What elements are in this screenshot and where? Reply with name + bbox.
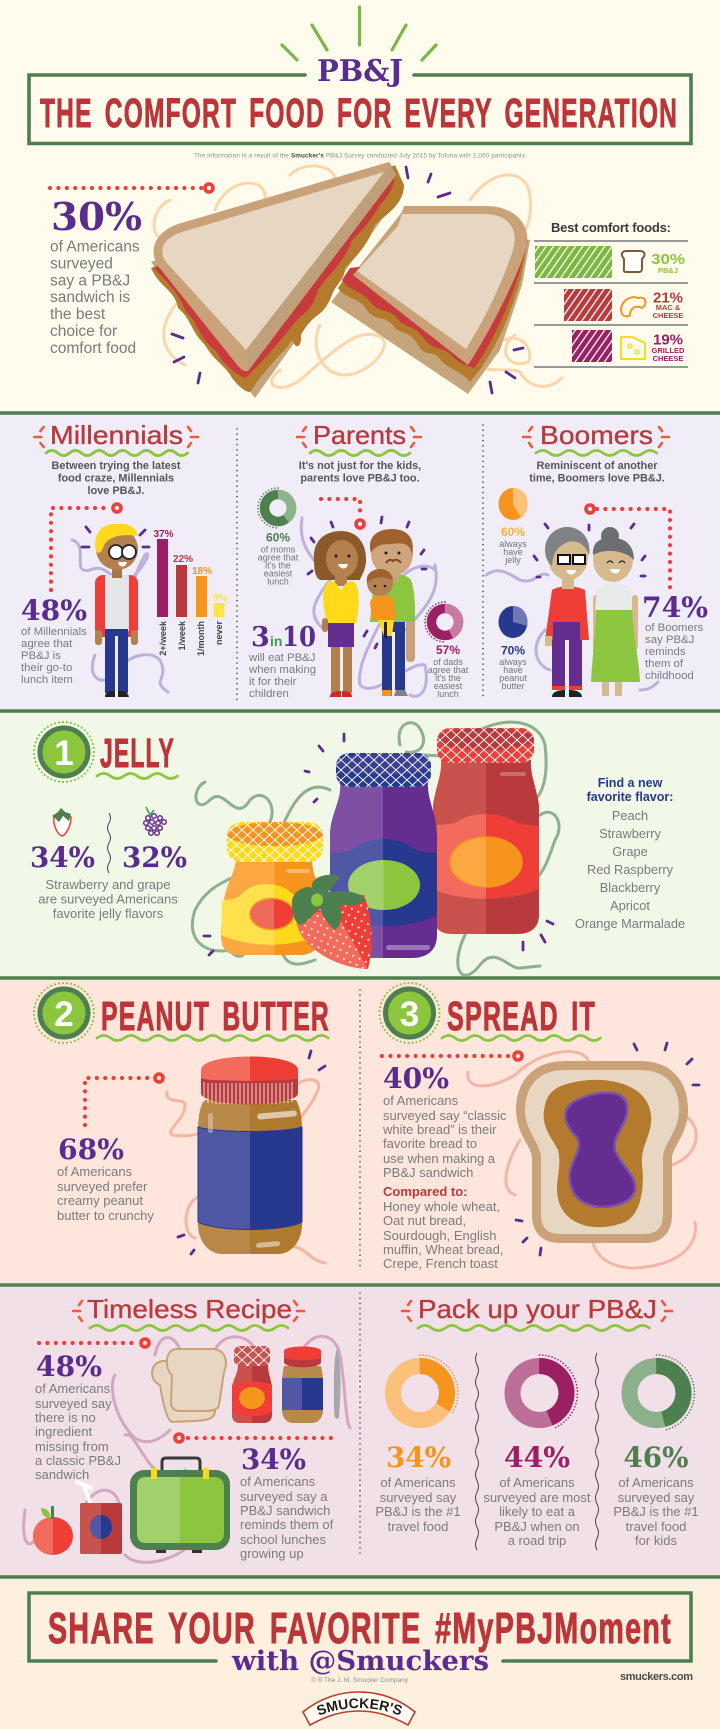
intro text [52, 460, 181, 497]
flavor list: favorite flavor: [587, 790, 673, 804]
heading [297, 420, 421, 456]
stat description: say PB&J [645, 634, 694, 646]
stat: 74%: 74% [642, 591, 708, 624]
stat: peanut butter: butter [501, 681, 525, 691]
stat description: of Americans [57, 1164, 133, 1179]
stat description: missing from [35, 1439, 109, 1454]
stat: 3 in 10 [251, 622, 316, 653]
heading [34, 420, 198, 456]
intro text [529, 460, 665, 484]
callout dotted line [175, 1434, 335, 1442]
stat: 46% kids: 46% [624, 1441, 688, 1474]
stat: 34% travel food: travel food [388, 1519, 448, 1534]
stat: jelly: jelly [504, 555, 521, 565]
jar: grape jelly [330, 753, 437, 958]
number badge: 3 [380, 983, 440, 1043]
stat description: PB&J sandwich [383, 1165, 473, 1180]
stat description: surveyed [50, 256, 113, 272]
heading [402, 1294, 672, 1330]
column divider [359, 1293, 361, 1557]
stat: 44% road trip: likely to eat a [499, 1504, 576, 1519]
flavor list: Apricot [610, 898, 650, 913]
flavor list: Find a new [598, 776, 663, 790]
illustration: jelly jar [232, 1346, 272, 1423]
label: mac and cheese 21%: 21% [653, 290, 683, 306]
label: grilled cheese 19%: 19% [653, 332, 683, 348]
donut: travel food 34% [393, 1355, 458, 1420]
stat description: reminds [645, 646, 686, 658]
pie: jelly 60% [498, 488, 528, 520]
stat description: surveyed prefer [57, 1179, 148, 1194]
heading [73, 1294, 304, 1330]
decorative squiggles [468, 1052, 696, 1268]
label: PB&J 30% [651, 251, 685, 275]
stat: moms: lunch [267, 576, 289, 586]
description: Strawberry and grape [45, 877, 171, 892]
number badge: 1 [34, 722, 94, 782]
stat description: lunch item [21, 674, 73, 686]
bar chart: PB&J frequency: 1/month [196, 621, 206, 656]
bar: grilled cheese [572, 330, 612, 362]
stat description [240, 1474, 334, 1561]
panel: footer call to action [27, 1591, 693, 1726]
stat description: surveyed say “classic [383, 1108, 507, 1123]
label: mac and cheese 21%: MAC & [656, 303, 681, 312]
people: boomers [534, 524, 645, 697]
stat: strawberry 34%: 34% [30, 841, 95, 874]
stat: 44% road trip: surveyed are most [484, 1490, 591, 1505]
stat: moms: easiest [264, 568, 293, 578]
chart rules [534, 241, 688, 367]
wavy dividers [476, 1353, 598, 1550]
stat: 44% road trip: 44% [504, 1441, 570, 1474]
stat: dads: lunch [437, 689, 459, 699]
heading [523, 420, 669, 456]
panel: Peanut Butter [34, 983, 330, 1263]
stat: dads: it's the [435, 673, 461, 683]
intro text: parents love PB&J too. [300, 472, 420, 484]
illustration: bread slice with spread [520, 1066, 684, 1238]
stat: 30%: 30% [51, 194, 142, 239]
stat: moms: it's the [265, 560, 291, 570]
stat description: creamy peanut [57, 1193, 143, 1208]
heading: Parents [313, 420, 406, 450]
section background: peanut butter and spread [0, 977, 720, 1284]
illustration: peanut butter jar [282, 1346, 323, 1423]
underline [442, 1036, 600, 1040]
column dividers: generations [237, 425, 483, 702]
number badge: 2 [34, 983, 94, 1043]
stat: 3 in 10: 3 [251, 622, 270, 653]
callout dotted line [321, 499, 364, 528]
stat description [35, 1381, 121, 1482]
donut: kids travel food 46% [630, 1355, 694, 1430]
chart heading: Best comfort foods: [551, 220, 671, 235]
heading: Timeless Recipe [87, 1294, 292, 1324]
section background: recipe and travel [0, 1284, 720, 1577]
stat description: PB&J is [21, 650, 61, 662]
decorative squiggles [154, 166, 562, 387]
stat: moms [258, 530, 299, 586]
stat: 3 in 10: in [270, 633, 282, 649]
compared-to list: muffin, Wheat bread, [383, 1242, 503, 1257]
logo: Smucker's [302, 1691, 416, 1726]
stat description: PB&J sandwich [240, 1503, 330, 1518]
section divider lines [0, 413, 720, 1577]
section background: footer [0, 1577, 720, 1729]
icon: grapes [144, 807, 166, 835]
intro text: time, Boomers love PB&J. [529, 472, 665, 484]
icon: green rays [282, 7, 436, 60]
with @Smuckers: with @Smuckers [231, 1646, 489, 1677]
bar: PB&J [535, 246, 612, 278]
icon: cheese [621, 337, 645, 359]
donut: moms 60% [258, 488, 292, 528]
label: PB&J 30%: PB&J [658, 266, 678, 275]
stat description: of Americans [240, 1474, 316, 1489]
stat description: say a PB&J [50, 272, 130, 290]
callout dotted line [39, 1339, 149, 1347]
label: grilled cheese 19%: GRILLED [652, 346, 685, 355]
stat: moms: agree that [258, 552, 299, 562]
stat description: of Boomers [645, 622, 704, 634]
wavy divider [108, 813, 110, 873]
panel: header [29, 7, 691, 160]
stat: peanut butter: have [503, 665, 523, 675]
intro text: It's not just for the kids, [299, 460, 421, 472]
icon: macaroni [621, 297, 645, 316]
compared-to list: Honey whole wheat, [383, 1199, 500, 1214]
section background: hero [0, 0, 720, 412]
callout dotted line [586, 505, 670, 590]
stat description [645, 622, 704, 682]
donut: road trip 44% [512, 1355, 577, 1428]
number badge: 2: 2 [54, 995, 74, 1034]
section background: generations [0, 412, 720, 710]
bar: mac and cheese [564, 289, 612, 321]
person: millennial [82, 524, 149, 697]
flavor list: Blackberry [600, 880, 661, 895]
stat: 34%: 34% [241, 1443, 306, 1476]
stat: dads: of dads [433, 657, 463, 667]
intro text [299, 460, 421, 484]
stat: 44% road trip: PB&J when on [494, 1519, 580, 1534]
stat: moms: of moms [261, 544, 296, 554]
stat: moms: 60% [266, 530, 290, 544]
illustration: bread slices [152, 1349, 226, 1422]
stat description: it for their [249, 676, 297, 688]
flavor list: Red Raspberry [587, 862, 674, 877]
stat: 34% travel food: of Americans [380, 1475, 456, 1490]
jar: red jelly [433, 728, 539, 934]
survey source note: The information is a result of the Smucker's PB&J Survey conducted July 2015 by Toluna with 2,000 participants. [194, 152, 527, 160]
stat description: growing up [240, 1546, 304, 1561]
panel: Parents [248, 420, 469, 700]
panel: Jelly [30, 722, 685, 975]
callout dotted line [50, 184, 213, 192]
heading: SPREAD IT [447, 993, 596, 1039]
panel: Pack up your PB&J [360, 1293, 699, 1557]
bar chart: PB&J frequency: 8% [213, 593, 227, 604]
panel: Millennials [21, 420, 227, 697]
intro text: Between trying the latest [52, 460, 181, 472]
column divider: spread [359, 990, 361, 1268]
bar chart: PB&J frequency: 1/week [177, 620, 187, 651]
stat description [21, 626, 87, 686]
stat: dads [428, 643, 469, 699]
decorative squiggle [486, 571, 658, 690]
heading: Pack up your PB&J [418, 1294, 657, 1324]
sandwich: right half [331, 206, 530, 394]
website: smuckers.com [620, 1671, 693, 1683]
stat: 48%: 48% [21, 594, 87, 627]
icon: bread [622, 251, 644, 272]
intro text: love PB&J. [88, 485, 144, 497]
accent ticks [178, 1051, 325, 1254]
stat: 48%: 48% [36, 1350, 102, 1383]
title frame [29, 75, 691, 144]
stat description: school lunches [240, 1532, 326, 1547]
callout dotted line [85, 1074, 163, 1125]
decorative squiggle [72, 540, 168, 692]
icon: strawberry [52, 808, 71, 836]
stat: 68%: 68% [58, 1133, 124, 1166]
panel: Boomers [486, 420, 708, 697]
stat description: when making [248, 664, 316, 676]
panel: Spread It [380, 983, 699, 1271]
stat: dads: agree that [428, 665, 469, 675]
flavor list: Grape [612, 844, 648, 859]
stat: 46% kids: of Americans [618, 1475, 694, 1490]
stat description [248, 652, 316, 700]
label: mac and cheese 21%: CHEESE [653, 311, 683, 320]
illustration: apple [33, 1506, 73, 1555]
stat description: use when making a [383, 1151, 496, 1166]
stat description: reminds them of [240, 1517, 334, 1532]
compared-to list: Compared to: [383, 1184, 468, 1199]
illustration: strawberry [292, 875, 371, 969]
underline [97, 774, 177, 778]
stat: jelly [499, 525, 527, 565]
stat: jelly: have [503, 547, 523, 557]
label: grilled cheese 19%: CHEESE [653, 354, 683, 363]
stat: 34% travel food: surveyed say [380, 1490, 457, 1505]
stat: 46% kids: surveyed say [618, 1490, 695, 1505]
intro text: Reminiscent of another [536, 460, 658, 472]
stat: 34% travel food: PB&J is the #1 [375, 1504, 461, 1519]
stat description: children [249, 688, 289, 700]
stat description: agree that [21, 638, 73, 650]
donut: dads 57% [425, 602, 458, 642]
decorative squiggles [192, 722, 559, 975]
jar: peanut butter [198, 1056, 302, 1254]
people: family [308, 517, 426, 697]
stat: 46% kids: PB&J is the #1 [613, 1504, 699, 1519]
illustration: lunchbox [130, 1458, 230, 1553]
stat: 44% road trip: a road trip [508, 1533, 566, 1548]
stat description: white bread” is their [382, 1122, 497, 1137]
stat: 34% travel food: 34% [386, 1441, 451, 1474]
stat description: the best [50, 306, 106, 323]
stat: dads: easiest [434, 681, 463, 691]
label: mac and cheese 21% [653, 290, 683, 320]
decorative squiggle [301, 518, 436, 696]
bar chart: PB&J frequency: 18% [192, 566, 212, 577]
stat description: childhood [645, 670, 694, 682]
section background: jelly [0, 710, 720, 977]
label: PB&J 30%: 30% [651, 251, 685, 268]
stat description: a classic PB&J [35, 1453, 121, 1468]
underline [97, 1036, 328, 1040]
stat description: surveyed say a [240, 1489, 328, 1504]
stat description: sandwich [35, 1467, 89, 1482]
stat description: favorite bread to [383, 1136, 477, 1151]
number badge: 1: 1 [54, 734, 74, 773]
accent ticks [204, 734, 553, 955]
stat description: of Americans [50, 238, 140, 256]
stat description: choice for [50, 323, 117, 340]
stat: 40%: 40% [383, 1062, 449, 1095]
jar: orange marmalade [221, 822, 323, 955]
stat: 46% kids: travel food [626, 1519, 686, 1534]
intro text: food craze, Millennials [58, 472, 174, 484]
stat: dads: 57% [436, 643, 460, 657]
stat: 46% kids: for kids [635, 1533, 677, 1548]
panel: Timeless Recipe [24, 1294, 350, 1562]
stat: 34% travel food [375, 1441, 461, 1534]
stat description: comfort food [50, 340, 136, 357]
bar chart: PB&J frequency: 37% [153, 529, 174, 540]
description: favorite jelly flavors [53, 906, 164, 921]
stat: 3 in 10: 10 [282, 622, 316, 653]
stat: peanut butter [499, 644, 527, 691]
accent ticks [516, 1043, 699, 1255]
stat description: ingredient [35, 1424, 92, 1439]
bar chart: PB&J frequency [153, 529, 227, 656]
purple accent ticks [172, 167, 523, 393]
stat: jelly: 60% [501, 525, 525, 539]
panel: best comfort foods chart [534, 220, 688, 367]
heading: Millennials [50, 420, 183, 450]
eyebrow: PB&J: PB&J [317, 54, 403, 89]
stat: 44% road trip: of Americans [499, 1475, 575, 1490]
compared-to list: Oat nut bread, [383, 1213, 466, 1228]
compared-to list [383, 1184, 503, 1271]
stat description: them of [645, 658, 684, 670]
stat description: butter to crunchy [57, 1208, 154, 1223]
stat: peanut butter: peanut [499, 673, 527, 683]
flavor list: Strawberry [599, 826, 662, 841]
stat description: of Americans [383, 1093, 459, 1108]
stat description [57, 1164, 154, 1223]
stat description [382, 1093, 507, 1180]
illustration: knife [334, 1348, 341, 1419]
panel: hero sandwich stat [50, 162, 562, 398]
stat description: of Americans [35, 1381, 111, 1396]
illustration: juice box [77, 1482, 122, 1554]
callout dotted line [382, 1052, 522, 1060]
stat: 46% kids [613, 1441, 699, 1548]
decorative squiggles [24, 1336, 350, 1562]
flavor list [575, 776, 685, 931]
description [38, 877, 178, 921]
stat description: surveyed say [35, 1396, 112, 1411]
flavor list: Orange Marmalade [575, 916, 685, 931]
stat: 44% road trip [484, 1441, 591, 1548]
stat description: will eat PB&J [248, 652, 315, 664]
stat description [50, 238, 140, 357]
bar chart: PB&J frequency: 2+/week [158, 620, 168, 656]
stat: jelly: always [499, 539, 527, 549]
stat description: of Millennials [21, 626, 87, 638]
pie: peanut butter 70% [498, 606, 528, 638]
stat description: sandwich is [50, 289, 130, 306]
label: grilled cheese 19% [652, 332, 685, 363]
sandwich: left half [151, 162, 404, 398]
description: are surveyed Americans [38, 892, 178, 906]
callout dotted line [51, 504, 121, 590]
bar chart: PB&J frequency: 22% [173, 554, 193, 565]
stat: grape 32%: 32% [122, 841, 187, 874]
heading: PEANUT BUTTER [101, 993, 330, 1039]
stat: peanut butter: always [499, 657, 527, 667]
logo: Smucker's: SMUCKER'S [317, 1698, 402, 1715]
compared-to list: Sourdough, English [383, 1228, 496, 1243]
stat description: their go-to [21, 662, 72, 674]
copyright: © ® The J. M. Smucker Company [311, 1676, 409, 1684]
flavor list: Peach [612, 808, 648, 823]
stat description: there is no [35, 1410, 96, 1425]
stat: peanut butter: 70% [501, 644, 525, 658]
number badge: 3: 3 [400, 995, 419, 1034]
footer frame [29, 1593, 691, 1661]
compared-to list: Crepe, French toast [383, 1256, 498, 1271]
heading: Boomers [540, 420, 653, 450]
decorative squiggles [167, 1080, 325, 1263]
bar chart: PB&J frequency: never [214, 621, 224, 645]
heading: JELLY [100, 730, 175, 776]
